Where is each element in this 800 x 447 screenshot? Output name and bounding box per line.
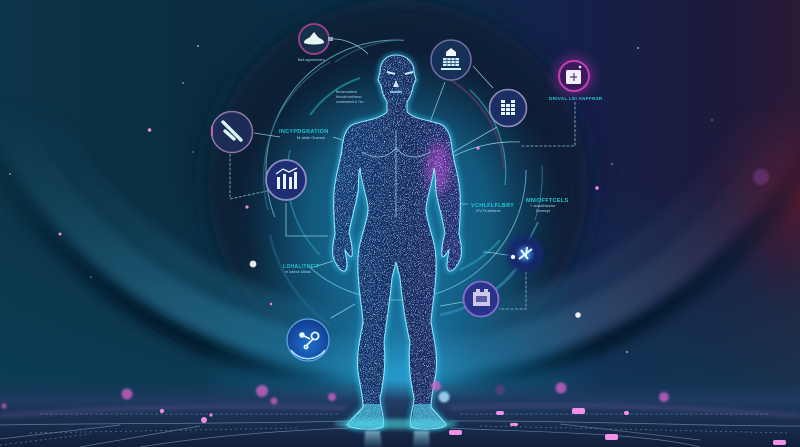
label: right arm bbox=[471, 203, 514, 213]
connector lines bbox=[230, 39, 575, 318]
label: hand: LOHAL/TNE'T bbox=[283, 264, 319, 270]
small note: onnemeernt b 7eo bbox=[336, 100, 364, 104]
label: right mid: + anoothtcene bbox=[530, 203, 556, 208]
label: right arm: VCHLFLFLBRY bbox=[471, 203, 514, 209]
human figure bbox=[330, 50, 465, 435]
label: right mid: Doreepr bbox=[536, 208, 551, 213]
label: top node: Bell agrnenhers bbox=[298, 58, 325, 62]
label: right arm: rPo Fs pintbres bbox=[476, 209, 501, 213]
icon: cloud node bbox=[299, 24, 333, 54]
floor grid bbox=[0, 406, 800, 447]
icon: box node bbox=[464, 282, 498, 316]
HUD rings bbox=[264, 40, 542, 325]
icon: molecule node bbox=[287, 319, 329, 361]
label: right mid: MNIOFFTCELS bbox=[526, 198, 568, 204]
label: left upper bbox=[279, 129, 329, 140]
label: magenta node: DRIVAL LEI ANFFRSR bbox=[549, 96, 603, 101]
small note bbox=[336, 90, 364, 104]
label: left upper: M abite Gravwe bbox=[297, 135, 326, 140]
icon: equalizer node bbox=[490, 90, 526, 126]
icon: spark node bbox=[507, 236, 543, 272]
icon: diagonal bars node bbox=[212, 112, 252, 152]
small note: Mrootd oreibiend bbox=[336, 95, 362, 99]
icon: home grid node bbox=[431, 40, 471, 80]
icon: magenta node bbox=[554, 56, 594, 96]
label: right mid bbox=[526, 198, 568, 213]
label: left upper: INCYPDGRATION bbox=[279, 129, 329, 135]
icon: bar chart node bbox=[266, 160, 306, 200]
small note: Bncxrcoadsrd bbox=[336, 90, 357, 94]
label: hand bbox=[283, 264, 319, 274]
label: hand: m lubinor Ulibak bbox=[285, 270, 311, 274]
